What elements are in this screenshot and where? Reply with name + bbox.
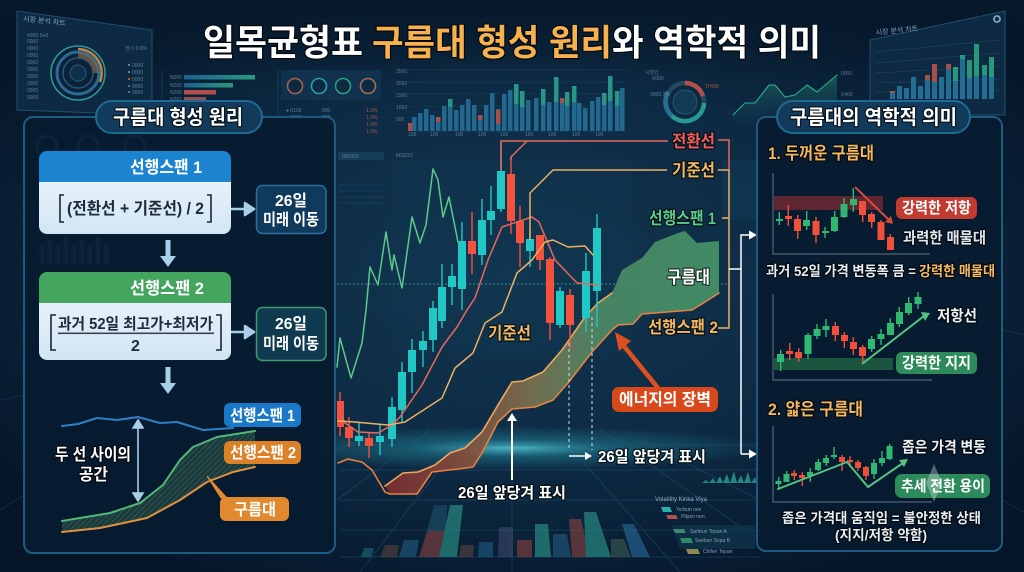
panel: cloud formation principle [24,101,335,553]
text: thick cloud meaning: 과거 52일 가격 변동폭 큼 = [766,263,916,279]
dashboard: column chart: 2500 [396,69,407,75]
leader lines and bracket [501,140,750,454]
dashboard: green area chart: X400 [841,92,853,98]
dashed projection lines [569,317,592,450]
panel: mechanical meaning of cloud [757,101,1002,551]
label: resistance line: 저항선 [937,307,977,325]
dashboard card: top left radial chart: 시장 분석 차트 [23,14,67,27]
red candles [337,157,574,458]
arrow and label: 26 days shift up: 26일 앞당겨 표시 [458,484,566,502]
label: cloud: 구름대 [667,268,710,287]
dashboard: gauges and table: 500 [322,122,331,128]
label: span 1 [224,403,301,427]
dashboard: horizontal bars [162,70,278,135]
main chart: kumo cloud [338,231,719,494]
dashboard: faint lower right sparkline [702,471,757,483]
chart: resistance [773,173,930,254]
dashboard: gauges and table: 1.0% [366,122,378,128]
dashboard: column chart: 2000 [396,81,407,87]
label: conversion line: 전환선 [672,132,715,151]
dashboard: floor legend table: Chifen Tepan [703,549,733,555]
dashboard: gauges and table: 500 [322,115,331,121]
dashboard: column chart: 500 [396,117,405,123]
arrow: span 2 to diagram [160,367,176,394]
box: 26 days forward (1) [256,186,326,234]
dashboard: column chart: 100 [595,132,604,138]
box: 26 days forward (1): 26일 [275,192,307,210]
dashboard card: top left radial chart: 0000 [27,81,38,87]
label: base line: 기준선 [672,161,715,180]
box: 26 days forward (2): 미래 이동 [263,335,319,353]
label: easy trend change [895,464,990,502]
dashboard card: top left radial chart: 0000 [27,53,38,59]
label: narrow price move: 좁은 가격 변동 [902,439,986,456]
label: easy trend change: 추세 전환 용이 [901,478,985,495]
label: span 1: 선행스팬 1 [230,406,295,425]
dashboard: donut: X000 [652,76,664,82]
dashboard: column chart: 100 [500,132,509,138]
box: span 1 formula: (전환선 + 기준선) / 2 [67,199,204,218]
text: thin cloud meaning [782,510,981,543]
dashboard: donut: 시장인 [645,69,659,76]
heading pill [96,101,262,133]
dashboard: column chart: 1500 [396,93,407,99]
text: thin cloud meaning: (지지/저항 약함) [835,527,927,543]
arrow: span 1 to move [231,203,254,215]
dashboard card: top right bar chart [870,11,1005,115]
dashboard card: top left radial chart: 0000 [132,84,143,90]
main chart: candlesticks [337,141,601,458]
heading: thick cloud: 1. 두꺼운 구름대 [768,144,874,163]
dashboard: column chart: 100 [548,132,557,138]
label: cloud [207,476,289,521]
box: span 1 formula [39,151,231,234]
label: span 2: 선행스팬 2 [230,443,296,462]
dashboard card: top left radial chart: 0000 [132,63,143,69]
chart: narrow range [773,426,932,502]
dashboard card: top left radial chart: 0000 [27,74,38,80]
arrows to right panel [749,230,757,458]
box: span 2 formula: 선행스팬 2 [130,279,204,298]
label: excessive supply: 과력한 매물대 [903,229,986,247]
chart: support [773,292,932,380]
label: space between lines: 공간 [79,465,108,484]
main chart: green price line [337,169,458,378]
dashboard: floor legend table: Volatility Kinka Viya [655,497,708,503]
dashboard: floor legend table [655,497,755,555]
label: strong resistance: 강력한 저항 [902,199,971,217]
arrow and label: 26 days shift right: 26일 앞당겨 표시 [598,448,706,466]
arrow and label: 26 days shift up [458,413,566,502]
dashboard: column chart: 100 [572,132,581,138]
dashboard card: top left radial chart: 0000 [27,46,38,52]
dashboard card: top left radial chart: 0000 [27,39,38,45]
dashboard: gauges and table: 500 [322,129,331,135]
dashboard: column chart: 100 [478,132,487,138]
dashboard card: top left radial chart: 0000 [132,70,143,76]
dashboard: floor bar chart [361,505,650,557]
title: 구름대 형성 원리 [372,22,612,63]
label: space between lines [55,445,131,484]
dashboard: green area chart: 0000 [841,71,852,77]
callout: wall of energy: 에너지의 장벽 [619,390,711,409]
box: span 2 formula: 과거 52일 최고가+최저가 [58,315,213,333]
dashboard: column chart: 1000 [396,105,407,111]
label: cloud: 구름대 [234,501,276,519]
title: 와 역학적 의미 [612,22,821,63]
main chart: orange base line [338,240,593,425]
dashboard: gauges and table: 500 [322,108,331,114]
dashboard: gauges and table: 1.0% [366,108,378,114]
text: thick cloud meaning: 강력한 매물대 [919,263,995,279]
dashboard: gauges and table: ● 0200 [286,115,302,121]
box: span 1 formula: 선행스팬 1 [130,158,202,177]
dashboard: gauges and table: ● 0100 [286,108,302,114]
dashboard: gauges and table: ● 0400 [286,129,302,135]
label: base line in chart: 기준선 [488,324,531,343]
dashboard card: top left radial chart: 0000 [27,60,38,66]
label: strong support: 강력한 지지 [902,354,971,372]
background: 000000 [342,154,359,160]
dashboard card: top left radial chart: 0000 [27,88,38,94]
dashboard card: top left radial chart: 4000 Sell [27,33,48,39]
dashboard card: top left radial chart: 0000 [132,90,143,96]
arrow: vertical gap [133,420,143,501]
dashboard card: top left radial chart [17,11,152,115]
box: span 2 formula: 2 [131,338,140,355]
dashboard: horizontal bars: N200 [170,90,182,96]
title: 일목균형표 [203,22,363,63]
dashboard: floor legend table: Seeban Sepa B [695,538,731,544]
label: span 1: 선행스팬 1 [649,209,716,228]
heading pill: 구름대의 역학적 의미 [790,106,957,129]
dashboard: floor legend table: Yerbun nen [676,507,702,513]
heading pill: 구름대 형성 원리 [113,106,243,129]
diagram: cloud between two lines [55,403,301,532]
dashboard: column chart [396,69,625,138]
dashboard: floor legend table: Pilpen nen [681,514,705,520]
dashboard: column chart: 100 [455,132,464,138]
dashboard: donut: TH0M [705,84,719,90]
teal candles [355,141,601,455]
main chart: dotted horizontal level [337,283,730,285]
faint dashboard behind left panel [37,136,145,265]
dashboard: column chart: 100 [408,132,417,138]
dashboard: gauges and table [281,70,381,135]
label: span 2: 선행스팬 2 [648,318,718,337]
dashboard: gauges and table: ● 0300 [286,122,302,128]
callout: wall of energy [612,332,718,412]
arrow: span 2 to move [231,326,254,338]
dashboard: column chart: 100 [430,132,439,138]
dashboard: horizontal bars: N200 [170,83,182,89]
dashboard: horizontal bars: N000 [170,75,182,81]
dashboard: horizontal bars: N261 [170,97,182,103]
box: 26 days forward (1): 미래 이동 [263,211,319,229]
label: span 2 [224,441,301,464]
text: thin cloud meaning: 좁은 가격대 움직임 = 불안정한 상태 [782,510,981,526]
dashboard card: top left radial chart: 전기 0.0% [125,45,148,52]
arrow: span 1 to span 2 [160,240,176,267]
heading: thin cloud: 2. 얇은 구름대 [768,400,863,419]
dashboard card: top left radial chart: 0000 [27,67,38,73]
box: 26 days forward (2): 26일 [275,315,307,333]
background: MSD21 [396,153,413,159]
dashboard: green area chart [733,71,853,125]
label: space between lines: 두 선 사이의 [55,445,131,464]
title [203,22,821,63]
heading pill [777,101,970,133]
text: thick cloud meaning [766,263,995,279]
dashboard card: top left radial chart: 0000 [27,95,38,101]
dashboard: floor legend table: Sarfeun Tepan A [690,529,728,535]
dashboard: gauges and table: 1.0% [366,129,378,135]
dashboard card: top left radial chart: 0000 [132,77,143,83]
main chart: red conversion line [342,217,598,433]
dashboard card: top right bar chart: 시장 분석 차트 [875,24,919,37]
dashboard: column chart: 100 [525,132,534,138]
dashboard: donut [645,69,719,121]
dashboard: donut: 0000.7% [650,92,670,98]
box: span 2 formula [39,272,231,360]
box: 26 days forward (2) [256,308,326,360]
dashboard: gauges and table: 1.0% [366,115,378,121]
